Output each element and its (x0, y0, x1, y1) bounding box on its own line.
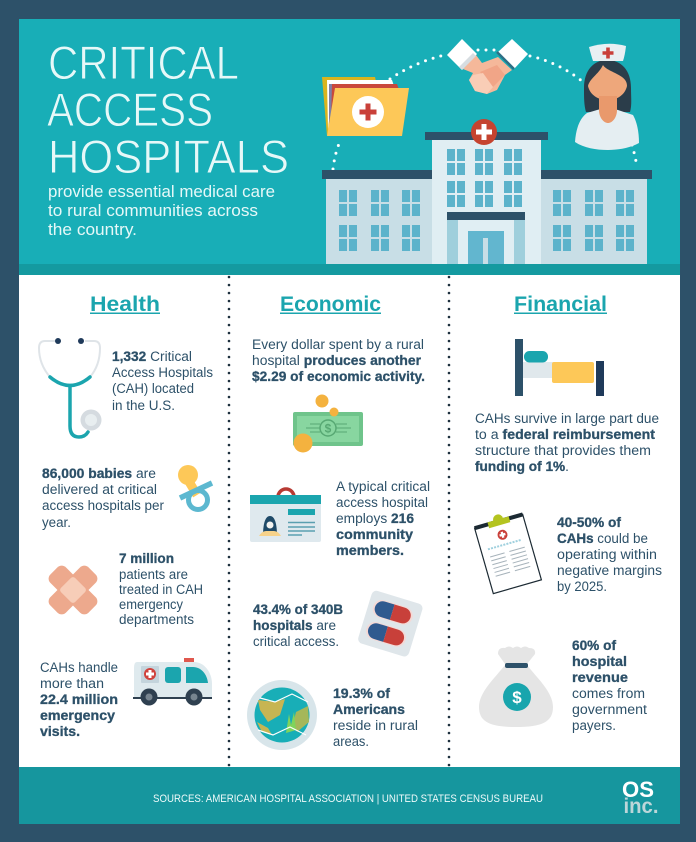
icon: money and coins: $ (325, 422, 332, 436)
icon: money and coins (293, 394, 363, 452)
text: 22.4 million visits: emergency (40, 708, 116, 723)
text: 86,000 babies: access hospitals per (42, 498, 165, 513)
sources: SOURCES: AMERICAN HOSPITAL ASSOCIATION | UNITED STATES CENSUS BUREAU (153, 793, 543, 805)
text: 7 million patients: emergency (119, 597, 183, 612)
text: 60% hospital revenue: hospital (572, 654, 627, 669)
text: 7 million patients (119, 551, 203, 627)
icon: money bag (479, 646, 553, 727)
text: 40-50% negative margins: 40-50% of (557, 515, 622, 530)
illustration: hospital building (322, 119, 652, 264)
footer band (19, 767, 680, 824)
text: 19.3% rural residents: Americans (333, 702, 405, 717)
text: 86,000 babies (42, 466, 165, 530)
text: 1,332 hospitals: 1,332 Critical (112, 349, 192, 364)
icon: map globe (247, 680, 317, 750)
text: 7 million patients: 7 million (119, 551, 174, 566)
text: 19.3% rural residents (333, 686, 418, 749)
text: 19.3% rural residents: 19.3% of (333, 686, 391, 701)
icon: pill pack (357, 590, 424, 658)
text: 40-50% negative margins: operating within (557, 547, 657, 562)
text: 340B hospitals: hospitals are (253, 618, 336, 633)
icon: ID badge (250, 489, 321, 542)
text: 340B hospitals: critical access. (253, 634, 339, 649)
logo: OS Inc (622, 777, 658, 818)
title: HOSPITALS (48, 130, 289, 183)
text: 216 community members: community (336, 527, 414, 542)
text: 216 community members: A typical critical (336, 479, 430, 494)
text: federal reimbursement: to a federal reimbursement (475, 427, 656, 442)
text: 40-50% negative margins (557, 515, 662, 594)
text: 60% hospital revenue: 60% of (572, 638, 617, 653)
text: 60% hospital revenue: payers. (572, 718, 616, 733)
title: CRITICAL (48, 36, 239, 89)
text: 7 million patients: patients are (119, 567, 188, 582)
subtitle: the country. (48, 220, 137, 239)
icon: stethoscope (39, 338, 102, 437)
text: 1,332 hospitals: in the U.S. (112, 398, 175, 413)
icon: clipboard (473, 508, 541, 594)
subtitle: to rural communities across (48, 201, 258, 220)
subtitle (48, 182, 275, 239)
text: 86,000 babies: 86,000 babies are (42, 466, 156, 481)
text: 60% hospital revenue: comes from (572, 686, 645, 701)
icon: medical folder (322, 77, 409, 136)
text: 1,332 hospitals: (CAH) located (112, 381, 194, 396)
icon: money bag: $ (512, 688, 522, 707)
text: economic activity: hospital produces another (252, 353, 422, 368)
text: 216 community members: employs 216 (336, 511, 414, 526)
text: 340B hospitals: 43.4% of 340B (253, 602, 343, 617)
icon: pacifier (178, 465, 212, 510)
icon: hospital bed (515, 339, 604, 396)
text: 7 million patients: departments (119, 612, 194, 627)
heading: Financial: Financial (514, 293, 607, 316)
text: 40-50% negative margins: negative margins (557, 563, 662, 578)
text: 22.4 million visits: CAHs handle (40, 660, 118, 675)
text: 86,000 babies: year. (42, 515, 71, 530)
text: federal reimbursement: structure that provides them (475, 443, 651, 458)
text: 216 community members (336, 479, 430, 558)
icon: handshake (447, 39, 528, 94)
header panel (19, 19, 680, 264)
text: 1,332 hospitals (112, 349, 213, 413)
text: 60% hospital revenue: revenue (572, 670, 629, 685)
text: federal reimbursement (475, 411, 659, 474)
text: federal reimbursement: funding of 1%. (475, 459, 569, 474)
text: 22.4 million visits: more than (40, 676, 104, 691)
dotted arc connecting illustrations (333, 50, 637, 169)
text: 22.4 million visits: 22.4 million (40, 692, 118, 707)
heading: Health: Health (90, 293, 160, 316)
text: 7 million patients: treated in CAH (119, 582, 203, 597)
text: 216 community members: access hospital (336, 495, 428, 510)
text: 340B hospitals (253, 602, 343, 649)
text: federal reimbursement: CAHs survive in large part due (475, 411, 659, 426)
text: 22.4 million visits: visits. (40, 724, 80, 739)
text: 40-50% negative margins: by 2025. (557, 579, 607, 594)
text: economic activity: Every dollar spent by a rural (252, 337, 424, 352)
logo: OS Inc: OS (622, 777, 654, 802)
heading: Economic: Economic (280, 293, 381, 316)
title (47, 36, 289, 183)
text: 60% hospital revenue: government (572, 702, 647, 717)
logo: OS Inc: inc. (624, 795, 658, 818)
icon: bandage (46, 563, 100, 617)
text: economic activity (252, 337, 425, 384)
icon: ambulance (133, 658, 212, 706)
text: 216 community members: members. (336, 543, 404, 558)
text: 22.4 million visits (40, 660, 118, 739)
column dividers (229, 277, 449, 767)
text: economic activity: $2.29 of economic activity. (252, 369, 425, 384)
text: 19.3% rural residents: reside in rural (333, 718, 418, 733)
text: 60% hospital revenue (572, 638, 647, 733)
text: 86,000 babies: delivered at critical (42, 482, 157, 497)
title: ACCESS (47, 83, 213, 136)
text: 1,332 hospitals: Access Hospitals (112, 365, 213, 380)
text: 40-50% negative margins: CAHs could be (557, 531, 648, 546)
text: 19.3% rural residents: areas. (333, 734, 369, 749)
icon: nurse (575, 44, 639, 150)
subtitle: provide essential medical care (48, 182, 275, 201)
